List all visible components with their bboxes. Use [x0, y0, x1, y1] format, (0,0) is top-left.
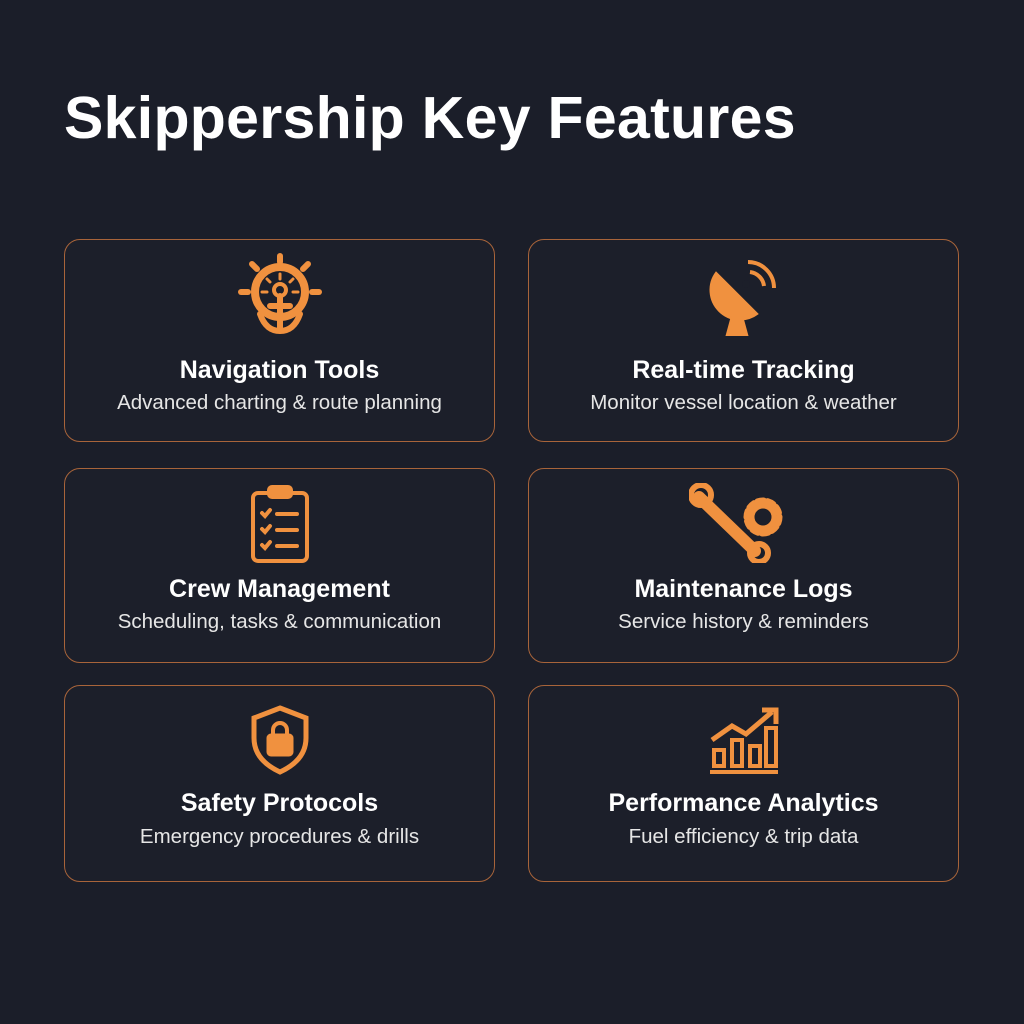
heading: Performance Analytics [608, 789, 879, 817]
heading: Real-time Tracking [632, 356, 855, 384]
text: Advanced charting & route planning [117, 391, 442, 414]
heading: Maintenance Logs [634, 575, 853, 603]
panel: navigation tools [64, 239, 495, 442]
icon: wrench and gear [689, 483, 782, 563]
icon: bar chart arrow [710, 708, 778, 774]
icon: satellite dish [710, 260, 776, 336]
panel: safety protocols [64, 685, 495, 882]
text: Fuel efficiency & trip data [629, 825, 858, 848]
text: Scheduling, tasks & communication [118, 610, 441, 633]
icon: ship wheel anchor [238, 253, 322, 334]
title: Skippership Key Features [64, 85, 796, 151]
heading: Crew Management [169, 575, 390, 603]
icon: shield lock [252, 705, 308, 775]
heading: Safety Protocols [181, 789, 378, 817]
icon: clipboard [251, 485, 309, 563]
text: Emergency procedures & drills [140, 825, 419, 848]
panel: performance analytics [528, 685, 959, 882]
text: Service history & reminders [618, 610, 869, 633]
text: Monitor vessel location & weather [590, 391, 897, 414]
panel: crew management [64, 468, 495, 663]
panel: real-time tracking [528, 239, 959, 442]
heading: Navigation Tools [180, 356, 379, 384]
panel: maintenance logs [528, 468, 959, 663]
